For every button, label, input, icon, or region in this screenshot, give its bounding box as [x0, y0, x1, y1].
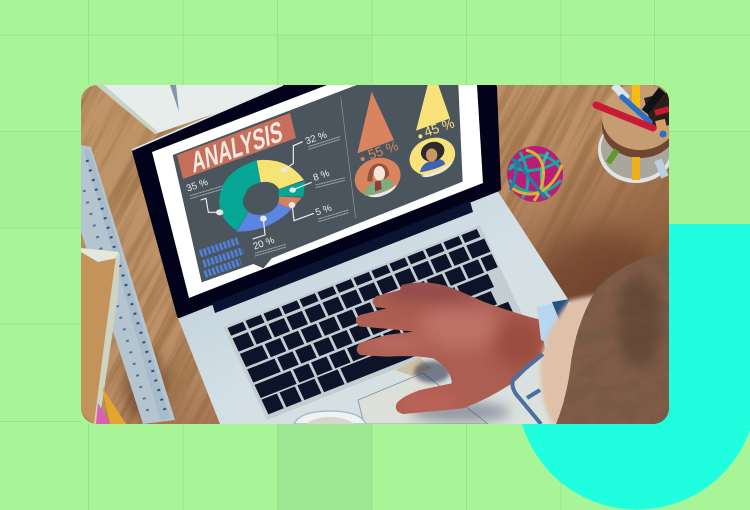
ruler — [81, 145, 175, 424]
55 percent label: 55 % — [366, 138, 400, 163]
white screen — [152, 85, 483, 298]
dark panel — [173, 85, 463, 282]
laptop base — [178, 190, 575, 424]
label caption lines — [190, 137, 348, 256]
notebook — [96, 85, 298, 134]
55 percent label — [360, 142, 398, 161]
percentage labels — [185, 129, 334, 253]
photo: hands on laptop — [81, 84, 678, 424]
chart connectors — [201, 142, 314, 239]
hinge — [212, 201, 473, 313]
percentage labels: 20 % — [252, 235, 277, 253]
analysis banner: ANALYSIS — [190, 115, 284, 180]
divider — [341, 97, 356, 218]
orange triangle — [357, 92, 394, 153]
keyboard — [223, 225, 524, 420]
hand — [356, 282, 545, 414]
people pictogram — [200, 240, 243, 274]
man avatar — [410, 138, 456, 178]
percentage labels: 5 % — [314, 203, 334, 219]
percentage labels: 8 % — [312, 168, 331, 184]
head — [540, 250, 669, 424]
white mug — [294, 411, 366, 424]
percentage labels: 32 % — [304, 129, 329, 147]
pencil jar — [596, 84, 678, 183]
wooden desk — [81, 85, 670, 424]
screen infographic — [173, 85, 463, 282]
laptop lid — [132, 85, 499, 316]
woman avatar — [354, 158, 400, 198]
connector dots — [216, 167, 296, 222]
glasses — [512, 354, 543, 424]
trackpad — [358, 358, 510, 424]
45 percent label: 45 % — [422, 116, 456, 140]
brown notebook — [81, 248, 126, 424]
rubber band ball — [507, 146, 563, 202]
percentage labels: 35 % — [185, 177, 210, 195]
analysis banner — [177, 113, 296, 180]
shirt cuff — [537, 299, 570, 345]
cyan rounded shape — [517, 224, 750, 510]
donut chart — [219, 160, 305, 232]
yellow triangle — [416, 85, 450, 131]
